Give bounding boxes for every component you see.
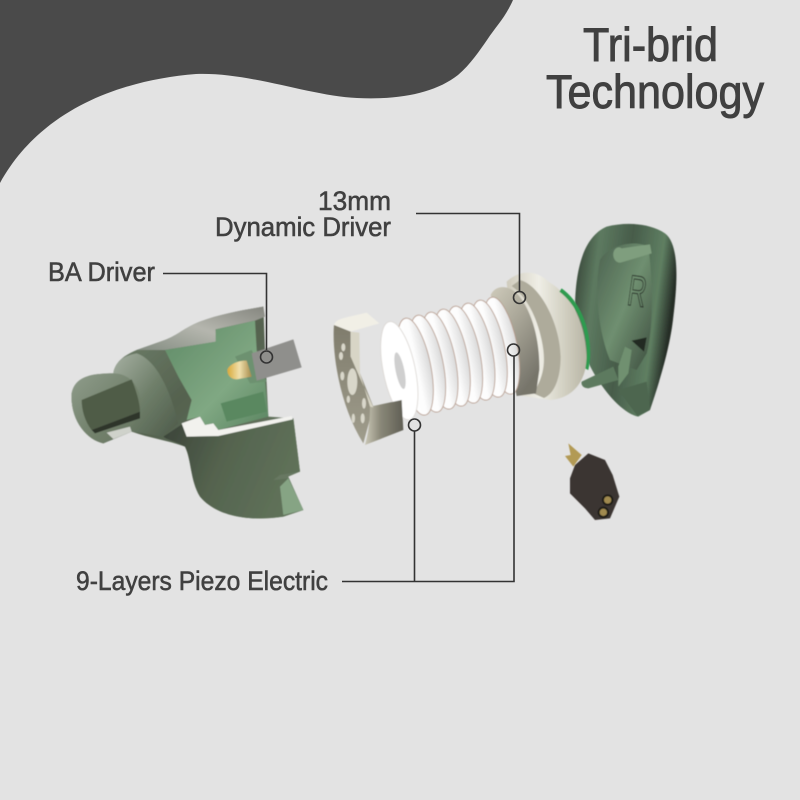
magnet lower block [365, 400, 403, 445]
first disc hole [392, 352, 408, 390]
bottom tab [280, 478, 303, 515]
faceplate outer shell [575, 224, 676, 417]
plug socket 2 [599, 508, 608, 517]
interior recess [221, 392, 267, 422]
faceplate inner surface [597, 243, 652, 370]
plug body [570, 453, 619, 520]
nozzle opening ring [72, 373, 141, 443]
magnet upper inner edge [351, 332, 373, 407]
label: 9-Layers Piezo Electric: 9-Layers Piezo Electric [76, 566, 328, 596]
piezo disc stack [374, 294, 527, 423]
label: 13mm Dynamic Driver [215, 186, 391, 242]
gold connector [227, 361, 252, 379]
nozzle tab [107, 427, 132, 439]
illustration: earphone shell housing [72, 307, 303, 518]
green seal ring [559, 288, 590, 370]
title [546, 18, 764, 118]
leader line: BA Driver [163, 274, 272, 363]
title: Technology [546, 65, 764, 118]
illustration: faceplate [575, 224, 676, 417]
label: 13mm Dynamic Driver: Dynamic Driver [215, 212, 391, 242]
dynamic driver outer ring [507, 273, 587, 400]
magnet vent holes [339, 343, 366, 423]
gold pins [565, 443, 582, 467]
illustration: connector plug [565, 443, 619, 520]
ring shadow band [512, 280, 561, 398]
magnet back face with vents [334, 325, 373, 443]
leader lines: 9-Layers Piezo Electric [342, 344, 520, 582]
magnet top face [334, 313, 379, 332]
nozzle inner highlight [92, 412, 140, 433]
label: BA Driver: BA Driver [48, 257, 155, 287]
hook [618, 347, 632, 387]
BA driver block [252, 339, 302, 381]
pin lower [581, 367, 618, 388]
green interior [165, 321, 268, 430]
dynamic driver cylinder [491, 287, 539, 396]
plug socket 1 [603, 495, 612, 505]
leader line: 13mm Dynamic Driver [416, 214, 526, 304]
label: 13mm Dynamic Driver: 13mm [318, 186, 391, 216]
pin top [613, 244, 652, 263]
dark wave header shape [0, 0, 513, 183]
driver holder [235, 350, 267, 383]
illustration: driver assembly [334, 273, 590, 445]
shell outer body [72, 307, 303, 518]
nozzle flange [113, 353, 178, 437]
lower shell [163, 418, 303, 518]
white rim edge [182, 416, 293, 437]
bottom tab [618, 382, 650, 416]
slot [632, 337, 647, 352]
nozzle inner cavity [82, 379, 140, 430]
title: Tri-brid [583, 18, 718, 71]
R emboss logo: R [625, 267, 650, 317]
top silver rim [137, 307, 265, 350]
